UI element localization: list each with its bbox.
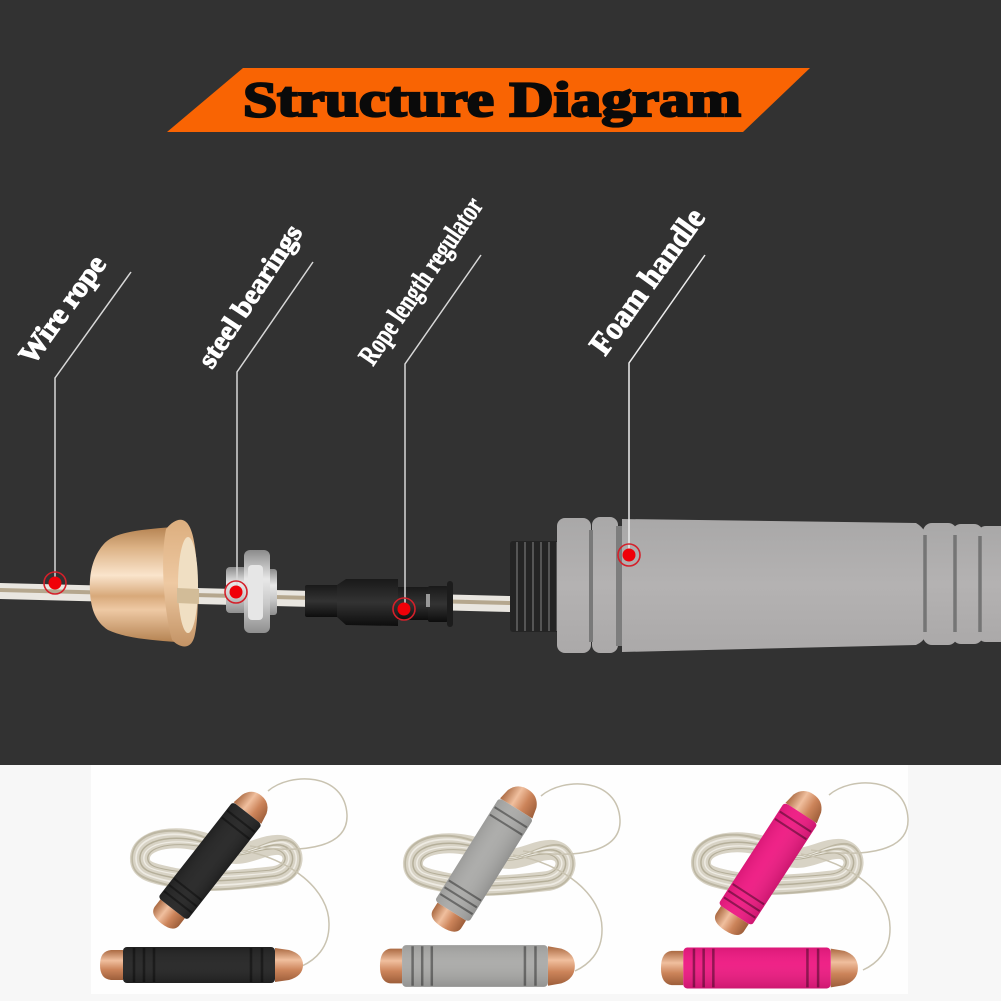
panel: dark structure background bbox=[0, 0, 1001, 765]
marker: steel bearings bbox=[225, 581, 247, 603]
wire rope shaft bbox=[0, 583, 510, 612]
end cap: copper cup bbox=[90, 520, 199, 646]
panel: product photo background bbox=[0, 765, 1001, 1001]
product: grey jump rope bbox=[380, 779, 620, 987]
marker: wire rope bbox=[44, 572, 66, 594]
title banner bbox=[167, 68, 810, 132]
threaded black connector bbox=[510, 541, 563, 632]
marker: rope length regulator bbox=[393, 598, 415, 620]
rope length regulator bbox=[305, 579, 453, 627]
title banner: Structure Diagram bbox=[243, 71, 741, 127]
rope coil bbox=[132, 779, 347, 966]
rope coil bbox=[405, 784, 620, 971]
rope coil bbox=[693, 783, 908, 970]
steel bearing bbox=[226, 550, 277, 633]
horizontal handle bbox=[661, 947, 858, 989]
product: black jump rope bbox=[100, 779, 347, 983]
product: pink jump rope bbox=[661, 783, 908, 989]
diagonal handle bbox=[147, 784, 276, 935]
diagonal handle bbox=[425, 779, 545, 938]
horizontal handle bbox=[380, 945, 575, 987]
horizontal handle bbox=[100, 947, 303, 983]
marker: foam handle bbox=[618, 544, 640, 566]
diagonal handle bbox=[708, 783, 830, 941]
label: foam handle: Foam handle bbox=[582, 201, 712, 361]
leader line: rope length regulator bbox=[405, 255, 481, 604]
leader line: steel bearings bbox=[237, 262, 313, 586]
leader line: wire rope bbox=[55, 272, 131, 578]
foam handle bbox=[510, 517, 1001, 653]
leader line: foam handle bbox=[629, 255, 705, 550]
label: rope length regulator: Rope length regulator bbox=[352, 191, 490, 371]
label: steel bearings: steel bearings bbox=[192, 219, 309, 374]
label: wire rope: Wire rope bbox=[13, 249, 113, 370]
grip rings and body bbox=[557, 517, 1001, 653]
